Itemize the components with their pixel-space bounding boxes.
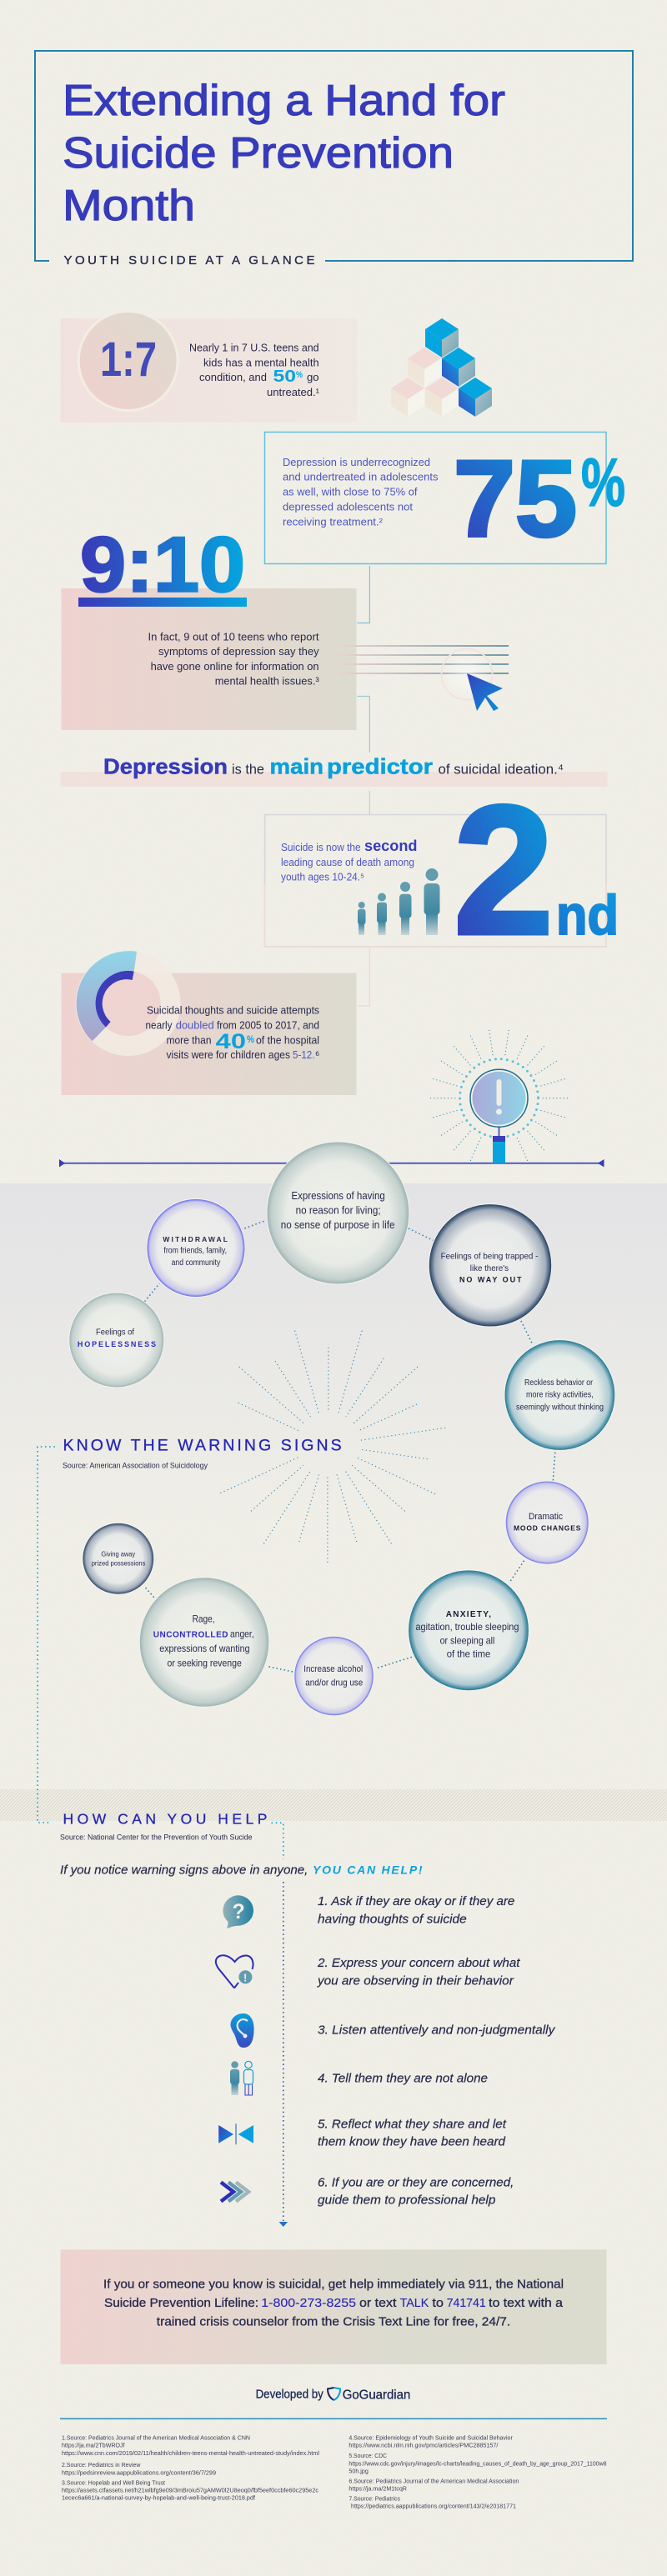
stat text: untreated.¹ (267, 386, 320, 398)
stat text: and undertreated in adolescents (283, 471, 439, 483)
warning sign: withdrawal: and community (172, 1258, 220, 1268)
warning sign: rage: anger, (230, 1628, 254, 1639)
warning sign: anxiety: ANXIETY, (446, 1610, 491, 1619)
step 6: guide them to professional help (318, 2193, 495, 2207)
warning sign: anxiety: agitation, trouble sleeping (415, 1621, 519, 1633)
title: Extending a Hand for (63, 77, 505, 125)
connector (358, 566, 369, 623)
title: Month (63, 182, 195, 230)
references left column: 2.Source: Pediatrics in Review (62, 2463, 141, 2468)
warning sign: hopelessness: HOPELESSNESS (78, 1340, 156, 1348)
callout: depression main predictor: Depression (103, 753, 228, 778)
stat text (283, 456, 439, 528)
developed by GoGuardian (256, 2388, 410, 2402)
big number 2: 2 (454, 768, 554, 973)
stat text: Depression is underrecognized (283, 456, 430, 468)
panel: second leading cause (265, 768, 619, 973)
stat text: % (296, 370, 303, 380)
step 2 (216, 1955, 520, 1988)
sunburst around heading (220, 1331, 445, 1563)
help intro: If you notice warning signs above in anyone, (60, 1863, 308, 1877)
icon: chevrons (221, 2182, 248, 2202)
connector (358, 697, 369, 753)
warning sign: giving away possessions (83, 1523, 154, 1594)
step 1: having thoughts of suicide (318, 1912, 467, 1926)
stat text: 50 (273, 368, 296, 386)
step 6 (221, 2175, 514, 2207)
stat text: symptoms of depression say they (158, 645, 319, 658)
warning sign: reckless behavior: more risky activities, (526, 1391, 594, 1400)
step 4 (230, 2061, 488, 2095)
icon: cursor on search lines (337, 645, 509, 711)
stat text: 40 (216, 1030, 246, 1053)
panel: crisis resources: TALK (400, 2296, 429, 2310)
heading: know the warning signs: Source: American Association of Suicidology (63, 1462, 208, 1470)
step 3: 3. Listen attentively and non-judgmentally (318, 2023, 556, 2038)
title (63, 77, 505, 230)
heading: know the warning signs (63, 1437, 342, 1470)
heading: how can you help: HOW CAN YOU HELP (63, 1810, 267, 1827)
divider (60, 2418, 607, 2419)
icon: question bubble (223, 1895, 253, 1928)
warning sign: rage: or seeking revenge (167, 1658, 242, 1669)
references left column: https://ja.ma/2TbWROJf (62, 2443, 125, 2449)
warning sign: mood changes: Dramatic (529, 1512, 563, 1522)
icon: question bubble: ? (232, 1900, 245, 1923)
icon: ear (230, 2013, 254, 2048)
warning sign: no way out: NO WAY OUT (459, 1276, 522, 1284)
icon: shield logo (328, 2388, 340, 2400)
stat text: doubled (176, 1018, 214, 1031)
warning sign: anxiety: of the time (447, 1648, 491, 1659)
help intro (60, 1863, 423, 1877)
ordinal nd: nd (556, 884, 619, 947)
subtitle: YOUTH SUICIDE AT A GLANCE (63, 253, 315, 268)
stat text: % (247, 1033, 254, 1045)
heading: know the warning signs: KNOW THE WARNING SIGNS (63, 1437, 342, 1455)
connector (358, 948, 369, 1006)
stat text: have gone online for information on (151, 660, 319, 673)
callout: depression main predictor: is the (232, 762, 264, 777)
percent sign: % (581, 445, 625, 521)
warning sign: no reason for living: Expressions of having (292, 1190, 385, 1202)
stat text: receiving treatment.² (283, 515, 384, 528)
title: Suicide Prevention (63, 129, 454, 178)
step 2: 2. Express your concern about what (317, 1956, 520, 1970)
panel: crisis resources: to text with a (489, 2296, 564, 2310)
warning sign: no reason for living: no reason for living; (296, 1205, 381, 1217)
dotted connectors between warning signs (145, 1221, 555, 1672)
heading: how can you help (60, 1810, 267, 1842)
callout: depression main predictor: predictor (327, 753, 433, 778)
warning sign: no way out: like there's (470, 1263, 509, 1273)
references left column: https://www.cnn.com/2019/02/11/health/children-teens-mental-health-untreated-study/index.html (62, 2451, 319, 2457)
step 6: 6. If you are or they are concerned, (318, 2175, 514, 2189)
warning sign: no way out: Feelings of being trapped - (441, 1252, 539, 1262)
stat text: of the hospital (256, 1033, 319, 1046)
stat text: ⁶ (315, 1048, 319, 1061)
icon: two people (230, 2061, 253, 2095)
icon: isometric cubes (391, 318, 492, 417)
references left column: https://assets.ctfassets.net/h21wlbfg9e09/3mBroiu57gAMW0l2U8eoq0/fbf5eef0ccbfe60c295e2c (62, 2488, 319, 2493)
references right column: 7.Source: Pediatrics (349, 2497, 400, 2503)
stat text (189, 342, 320, 398)
references left column: 1ecec6a661/a-national-survey-by-hopelab-and-well-being-trust-2018.pdf (62, 2496, 255, 2502)
step 5 (218, 2117, 507, 2149)
references right column: https://pediatrics.aappublications.org/content/143/2/e20181771 (351, 2504, 516, 2510)
step 5: 5. Reflect what they share and let (318, 2117, 507, 2131)
dotted arrow down (272, 1823, 288, 2227)
icon: heart with alert (216, 1955, 253, 1988)
panel: 9 in 10 stat (62, 520, 357, 730)
warning sign: no reason for living (267, 1142, 409, 1284)
references right column: 5.Source: CDC (349, 2453, 387, 2459)
icon: magnifier with exclamation and rays (429, 1028, 570, 1163)
panel: 1 in 7 stat (60, 312, 357, 423)
warning sign: alcohol or drug use: Increase alcohol (303, 1664, 363, 1674)
stat text: youth ages 10-24.⁵ (281, 871, 364, 883)
icon: people growing in height (358, 868, 440, 935)
callout: depression main predictor: of suicidal ideation.⁴ (439, 762, 564, 777)
hatched transition band (0, 1789, 667, 1821)
icon: heart with alert: ! (243, 1972, 247, 1983)
chart: donut (77, 951, 171, 1046)
warning sign: alcohol or drug use: and/or drug use (305, 1678, 363, 1688)
stat text: Suicide is now the (281, 841, 361, 853)
panel: doubled attempts stat (62, 951, 357, 1095)
big ratio: 9:10 (80, 520, 245, 608)
stat text: In fact, 9 out of 10 teens who report (148, 630, 319, 643)
stat text: second (364, 838, 417, 854)
warning sign: reckless behavior: Reckless behavior or (524, 1378, 594, 1388)
references right column: https://www.ncbi.nlm.nih.gov/pmc/articles/PMC2885157/ (349, 2443, 498, 2449)
warning sign: anxiety (409, 1570, 529, 1691)
stat text: 5-12. (293, 1048, 315, 1061)
panel: crisis resources: or text (359, 2296, 397, 2310)
references right column: 50h.jpg (349, 2468, 369, 2474)
help intro: YOU CAN HELP! (313, 1863, 423, 1876)
stat text: go (307, 371, 319, 383)
dotted link to help section (38, 1447, 55, 1823)
panel: crisis resources: 741741 (447, 2296, 486, 2310)
panel: crisis resources: to (432, 2296, 444, 2310)
warning sign: anxiety: or sleeping all (440, 1634, 494, 1646)
warning sign: withdrawal: from friends, family, (163, 1247, 227, 1256)
warning sign: alcohol or drug use (294, 1636, 374, 1716)
warning sign: reckless behavior (504, 1340, 615, 1450)
warning sign: rage: Rage, (193, 1613, 215, 1625)
warning sign: hopelessness (69, 1293, 164, 1388)
ratio circle: 1:7 (100, 333, 157, 387)
connector (369, 791, 370, 814)
step 3 (230, 2013, 556, 2048)
panel: crisis resources (60, 2249, 607, 2364)
timeline rule with end arrows (59, 1159, 604, 1167)
references right column: 6.Source: Pediatrics Journal of the American Medical Association (349, 2478, 519, 2484)
stat text: kids has a mental health (203, 357, 319, 368)
developed by GoGuardian: GoGuardian (343, 2388, 410, 2402)
warning sign: giving away possessions: Giving away (101, 1549, 136, 1558)
stat text: Nearly 1 in 7 U.S. teens and (189, 342, 319, 354)
step 5: them know they have been heard (318, 2135, 506, 2149)
references left column: 1.Source: Pediatrics Journal of the American Medical Association & CNN (62, 2436, 250, 2442)
stat text (281, 838, 417, 883)
warning sign: withdrawal (147, 1198, 245, 1297)
callout: depression main predictor: main (270, 753, 323, 778)
warning sign: no reason for living: no sense of purpose in life (281, 1219, 395, 1231)
stat text (148, 630, 319, 688)
ratio circle (78, 312, 178, 410)
step 1: 1. Ask if they are okay or if they are (318, 1894, 514, 1908)
icon: reflection triangles (218, 2123, 253, 2144)
references right column: https://www.cdc.gov/injury/images/lc-charts/leading_causes_of_death_by_age_group_2017_1100w8 (349, 2461, 607, 2467)
stat text: more than (167, 1033, 212, 1046)
warning sign: giving away possessions: prized possessions (92, 1559, 145, 1568)
warning sign: no way out (429, 1204, 552, 1327)
panel: crisis resources: If you or someone you know is suicidal, get help immediately via 911, the National (103, 2278, 564, 2292)
references left column: https://pedsinreview.aappublications.org/content/36/7/299 (62, 2470, 216, 2476)
stat text: condition, and (199, 371, 267, 383)
warning sign: rage: UNCONTROLLED (153, 1630, 228, 1639)
big number 75: 75 (454, 438, 577, 559)
warning sign: withdrawal: WITHDRAWAL (163, 1235, 228, 1243)
warning sign: rage (139, 1578, 269, 1707)
step 2: you are observing in their behavior (317, 1973, 514, 1988)
stat text: depressed adolescents not (283, 500, 413, 513)
panel: crisis resources: Suicide Prevention Lifeline: (104, 2296, 258, 2310)
stat text (145, 1004, 319, 1061)
stat text: mental health issues.³ (215, 675, 319, 688)
callout: depression main predictor (60, 753, 607, 787)
stat text: nearly (145, 1018, 173, 1031)
panel: 75 percent stat (265, 432, 625, 563)
stat text: visits were for children ages (167, 1048, 290, 1061)
stat text: as well, with close to 75% of (283, 486, 418, 498)
warning sign: rage: expressions of wanting (159, 1643, 250, 1654)
references right column: https://ja.ma/2M1tcqR (349, 2486, 407, 2492)
warning sign: hopelessness: Feelings of (96, 1328, 134, 1338)
warning signs section background (0, 1183, 667, 1517)
warning sign: reckless behavior: seemingly without thinking (516, 1403, 604, 1413)
references left column (62, 2436, 319, 2502)
panel: crisis resources: trained crisis counselor from the Crisis Text Line for free, 24/7. (157, 2314, 510, 2328)
references right column (349, 2436, 607, 2510)
title frame (35, 51, 633, 268)
step 4: 4. Tell them they are not alone (318, 2071, 488, 2085)
panel: crisis resources: 1-800-273-8255 (261, 2296, 356, 2310)
stat text: leading cause of death among (281, 856, 414, 868)
heading: how can you help: Source: National Center for the Prevention of Youth Sucide (60, 1833, 253, 1842)
references right column: 4.Source: Epidemiology of Youth Suicide and Suicidal Behavior (349, 2436, 513, 2442)
warning sign: mood changes: MOOD CHANGES (514, 1523, 581, 1532)
step 1 (223, 1894, 514, 1928)
warning sign: mood changes (505, 1481, 589, 1564)
references left column: 3.Source: Hopelab and Well Being Trust (62, 2480, 165, 2486)
developed by GoGuardian: Developed by (256, 2388, 323, 2402)
stat text: Suicidal thoughts and suicide attempts (147, 1004, 319, 1017)
stat text: from 2005 to 2017, and (217, 1018, 319, 1031)
underline bar (78, 598, 247, 607)
